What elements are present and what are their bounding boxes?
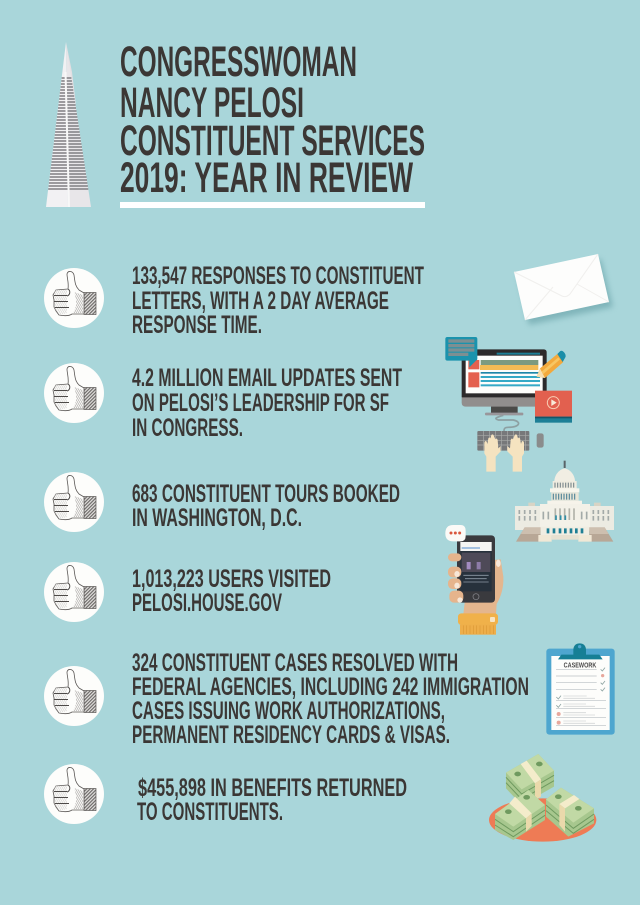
icon: thumbs up 3	[44, 472, 104, 532]
icon: computer with keyboard and hands	[445, 337, 572, 472]
icon: thumbs up 5	[44, 666, 104, 726]
text: letter responses	[132, 262, 424, 339]
text: constituent cases	[132, 649, 529, 749]
title: NANCY PELOSI	[120, 79, 304, 127]
text: benefits: TO CONSTITUENTS.	[137, 798, 283, 826]
text: website users	[132, 565, 331, 617]
text: tours	[132, 480, 400, 532]
clipboard label: CASEWORK	[564, 662, 596, 669]
text: tours: IN WASHINGTON, D.C.	[132, 504, 302, 532]
title underline	[120, 202, 425, 208]
text: website users: PELOSI.HOUSE.GOV	[132, 589, 282, 617]
icon: stacks of money	[489, 754, 596, 842]
icon: thumbs up 6	[44, 764, 104, 824]
text: letter responses: RESPONSE TIME.	[132, 311, 262, 339]
icon: casework clipboard	[546, 643, 615, 735]
text: email updates: ON PELOSI’S LEADERSHIP FOR SF	[132, 389, 389, 417]
icon: envelope	[514, 254, 613, 325]
text: email updates	[132, 364, 402, 442]
icon: Transamerica pyramid	[46, 42, 91, 207]
icon: thumbs up 4	[44, 562, 104, 622]
icon: thumbs up 2	[44, 363, 104, 423]
icon: US Capitol	[515, 461, 614, 542]
title: 2019: YEAR IN REVIEW	[120, 154, 413, 202]
icon: hand holding smartphone	[445, 525, 503, 635]
text: email updates: IN CONGRESS.	[132, 414, 243, 442]
text: benefits	[137, 774, 407, 826]
text: website users: 1,013,223 USERS VISITED	[132, 565, 331, 593]
title	[120, 38, 425, 202]
text: letter responses: LETTERS, WITH A 2 DAY AVERAGE	[132, 287, 389, 315]
text: email updates: 4.2 MILLION EMAIL UPDATES SENT	[132, 364, 402, 392]
title: CONSTITUENT SERVICES	[120, 117, 425, 165]
icon: thumbs up 1	[44, 268, 104, 328]
text: letter responses: 133,547 RESPONSES TO CONSTITUENT	[132, 262, 424, 290]
text: benefits: $455,898 IN BENEFITS RETURNED	[138, 774, 407, 802]
title: CONGRESSWOMAN	[120, 38, 357, 86]
text: constituent cases: CASES ISSUING WORK AUTHORIZATIONS,	[132, 697, 445, 725]
text: tours: 683 CONSTITUENT TOURS BOOKED	[132, 480, 400, 508]
text: constituent cases: PERMANENT RESIDENCY CARDS & VISAS.	[132, 721, 450, 749]
